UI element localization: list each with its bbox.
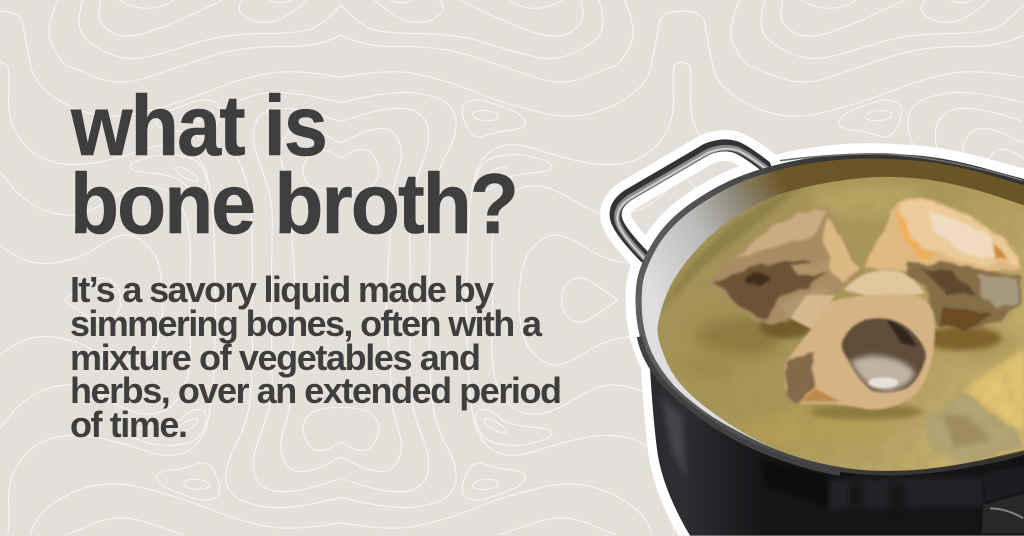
pot body [650,368,1024,536]
bone: meat on upper right bone [907,263,1022,332]
title: bone broth? [70,157,517,252]
bone: upper left [708,207,860,323]
description text [70,269,562,445]
description text: of time. [70,404,188,445]
description text: herbs, over an extended period [70,370,562,411]
pot of bone broth photo illustration [616,143,1024,536]
title: what is [70,79,326,174]
white sticker outline [616,143,1024,536]
broth surface [653,170,1024,473]
title [70,79,517,252]
bone: front with marrow hollow [785,270,935,410]
bone: upper right [863,197,1024,277]
description text: mixture of vegetables and [70,337,481,378]
description text: simmering bones, often with a [70,303,543,344]
pot handle [616,145,767,261]
pot rim [635,153,1024,476]
description text: It’s a savory liquid made by [70,269,494,310]
